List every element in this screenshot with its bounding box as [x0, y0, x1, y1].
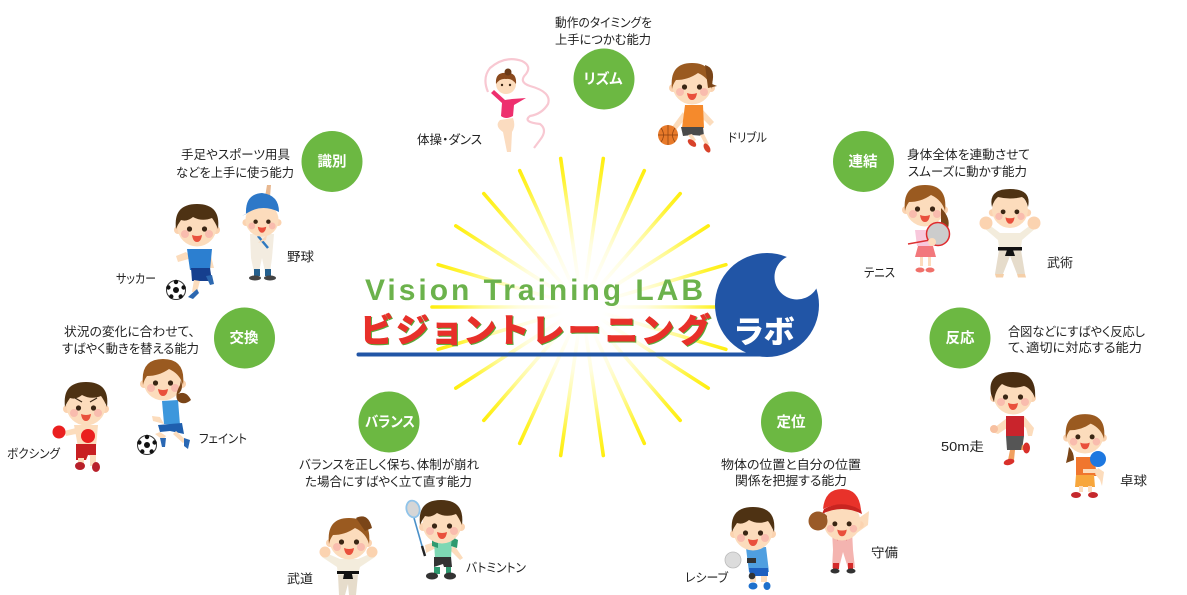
figure: fielder girl [808, 489, 869, 574]
badge: exchange: 交換 [230, 329, 259, 347]
badge: linking [833, 131, 894, 192]
panel: exchange [7, 308, 275, 472]
description: exchange: すばやく動きを替える能力 [62, 341, 199, 356]
logo emblem [715, 252, 822, 357]
logo japanese title: ビジョントレーニング [361, 312, 711, 349]
label: budo: 武道 [287, 571, 314, 586]
description: rhythm: 動作のタイミングを [555, 16, 652, 30]
label: badminton: バトミントン [466, 561, 526, 575]
description: exchange: 状況の変化に合わせて、 [64, 324, 195, 339]
figure: budo girl [320, 516, 378, 595]
badge: reaction: 反応 [946, 330, 975, 347]
figure: soccer boy [166, 204, 220, 300]
description: linking: スムーズに動かす能力 [908, 164, 1027, 179]
badge: linking: 連結 [848, 152, 878, 170]
description: positioning: 物体の位置と自分の位置 [721, 458, 861, 472]
figure: dribble girl [658, 63, 717, 154]
label: dribble: ドリブル [728, 130, 767, 145]
logo underline [358, 352, 760, 356]
logo english title: Vision Training LAB [365, 274, 703, 307]
panel: linking [833, 131, 1073, 280]
figure: feint girl [137, 359, 191, 454]
badge: positioning: 定位 [776, 414, 806, 431]
badge: identification [302, 131, 362, 192]
logo: Vision Training Lab [358, 252, 822, 357]
figure: receive boy [725, 507, 776, 590]
description: reaction [1008, 325, 1145, 355]
figure: gymnast [485, 59, 549, 152]
badge: balance [358, 392, 420, 452]
label: gymnastics: 体操・ダンス [417, 132, 482, 147]
label: boxing: ボクシング [7, 447, 60, 461]
panel: reaction [930, 308, 1148, 498]
description: identification: 手足やスポーツ用具 [181, 148, 290, 162]
label: table tennis: 卓球 [1120, 473, 1148, 488]
panel: identification [116, 131, 362, 300]
description: reaction: て、適切に対応する能力 [1008, 340, 1142, 355]
description: balance: た場合にすばやく立て直す能力 [305, 474, 472, 489]
description: rhythm [555, 16, 652, 47]
figure: martial arts man [980, 189, 1040, 278]
figure: baseball boy [242, 185, 282, 280]
description: identification: などを上手に使う能力 [176, 165, 294, 180]
description: balance [299, 457, 480, 489]
figure: tennis girl [902, 185, 950, 272]
figure: runner boy [990, 372, 1036, 466]
badge: balance: バランス [365, 415, 415, 431]
label: 50m dash: 50m走 [941, 440, 985, 454]
label: baseball: 野球 [287, 249, 315, 264]
badge: exchange [214, 308, 275, 368]
label: soccer: サッカー [116, 272, 156, 286]
panel: balance [287, 392, 526, 595]
description: rhythm: 上手につかむ能力 [555, 32, 651, 47]
description: balance: バランスを正しく保ち、体制が崩れ [299, 457, 480, 472]
panel: rhythm [417, 16, 767, 154]
panel: positioning [685, 392, 899, 590]
label: receive: レシーブ [685, 570, 729, 585]
label: feint: フェイント [199, 432, 247, 446]
description: linking [907, 147, 1030, 179]
label: martial arts: 武術 [1047, 255, 1073, 270]
figure: badminton boy [405, 499, 465, 580]
description: linking: 身体全体を連動させて [907, 147, 1030, 162]
description: positioning: 関係を把握する能力 [735, 473, 847, 488]
label: tennis: テニス [864, 266, 895, 280]
logo emblem: ラボ [735, 315, 795, 350]
label: fielding: 守備 [871, 546, 899, 560]
description: reaction: 合図などにすばやく反応し [1008, 325, 1145, 339]
badge: positioning [761, 392, 822, 452]
sunburst rays [432, 158, 732, 456]
description: exchange [62, 324, 199, 356]
figure: boxer boy [52, 382, 109, 472]
figure: table tennis girl [1063, 414, 1107, 498]
badge: rhythm: リズム [584, 70, 622, 88]
description: identification [176, 148, 294, 180]
badge: rhythm [574, 48, 634, 110]
badge: reaction [930, 308, 990, 368]
badge: identification: 識別 [318, 154, 346, 170]
description: positioning [721, 458, 861, 488]
